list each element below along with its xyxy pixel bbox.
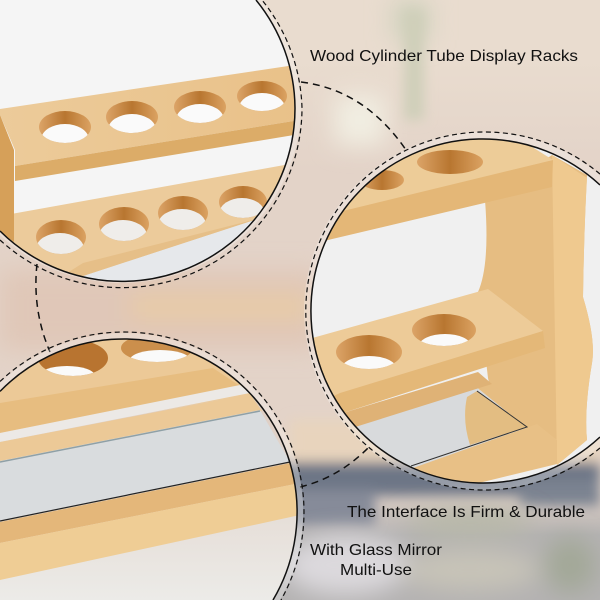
label: display racks: Wood Cylinder Tube Display Racks bbox=[310, 48, 578, 65]
lower rail bbox=[0, 463, 300, 580]
connector: lower arc bbox=[300, 448, 368, 487]
left post bbox=[0, 115, 14, 242]
mirror panel bbox=[0, 410, 290, 521]
label: firm interface: The Interface Is Firm & Durable bbox=[347, 504, 585, 521]
rail holes bbox=[336, 150, 483, 380]
back wood strip bbox=[0, 394, 262, 461]
mirror bbox=[356, 388, 524, 468]
panel: magnified glass mirror bbox=[0, 332, 304, 600]
connector: left arc bbox=[36, 264, 50, 352]
lower rail holes bbox=[36, 186, 267, 254]
connector: top right arc bbox=[301, 82, 406, 150]
back side rail bbox=[478, 384, 534, 428]
panel: magnified side joint bbox=[304, 130, 600, 490]
middle rail bbox=[305, 289, 545, 428]
top rail bbox=[0, 340, 250, 433]
top rail bbox=[327, 140, 553, 240]
panel: magnified tube holes bbox=[0, 0, 302, 293]
front bottom rail bbox=[414, 426, 557, 482]
white gap bbox=[0, 385, 250, 442]
label: multi-use: Multi-Use bbox=[340, 562, 412, 579]
upper rail bbox=[0, 65, 300, 181]
upper rail holes bbox=[39, 81, 287, 143]
label: glass mirror: With Glass Mirror bbox=[310, 542, 443, 559]
mirror edge bbox=[0, 411, 260, 462]
lower rail bbox=[0, 165, 284, 276]
rail holes bbox=[39, 340, 190, 376]
side post bbox=[478, 155, 593, 465]
